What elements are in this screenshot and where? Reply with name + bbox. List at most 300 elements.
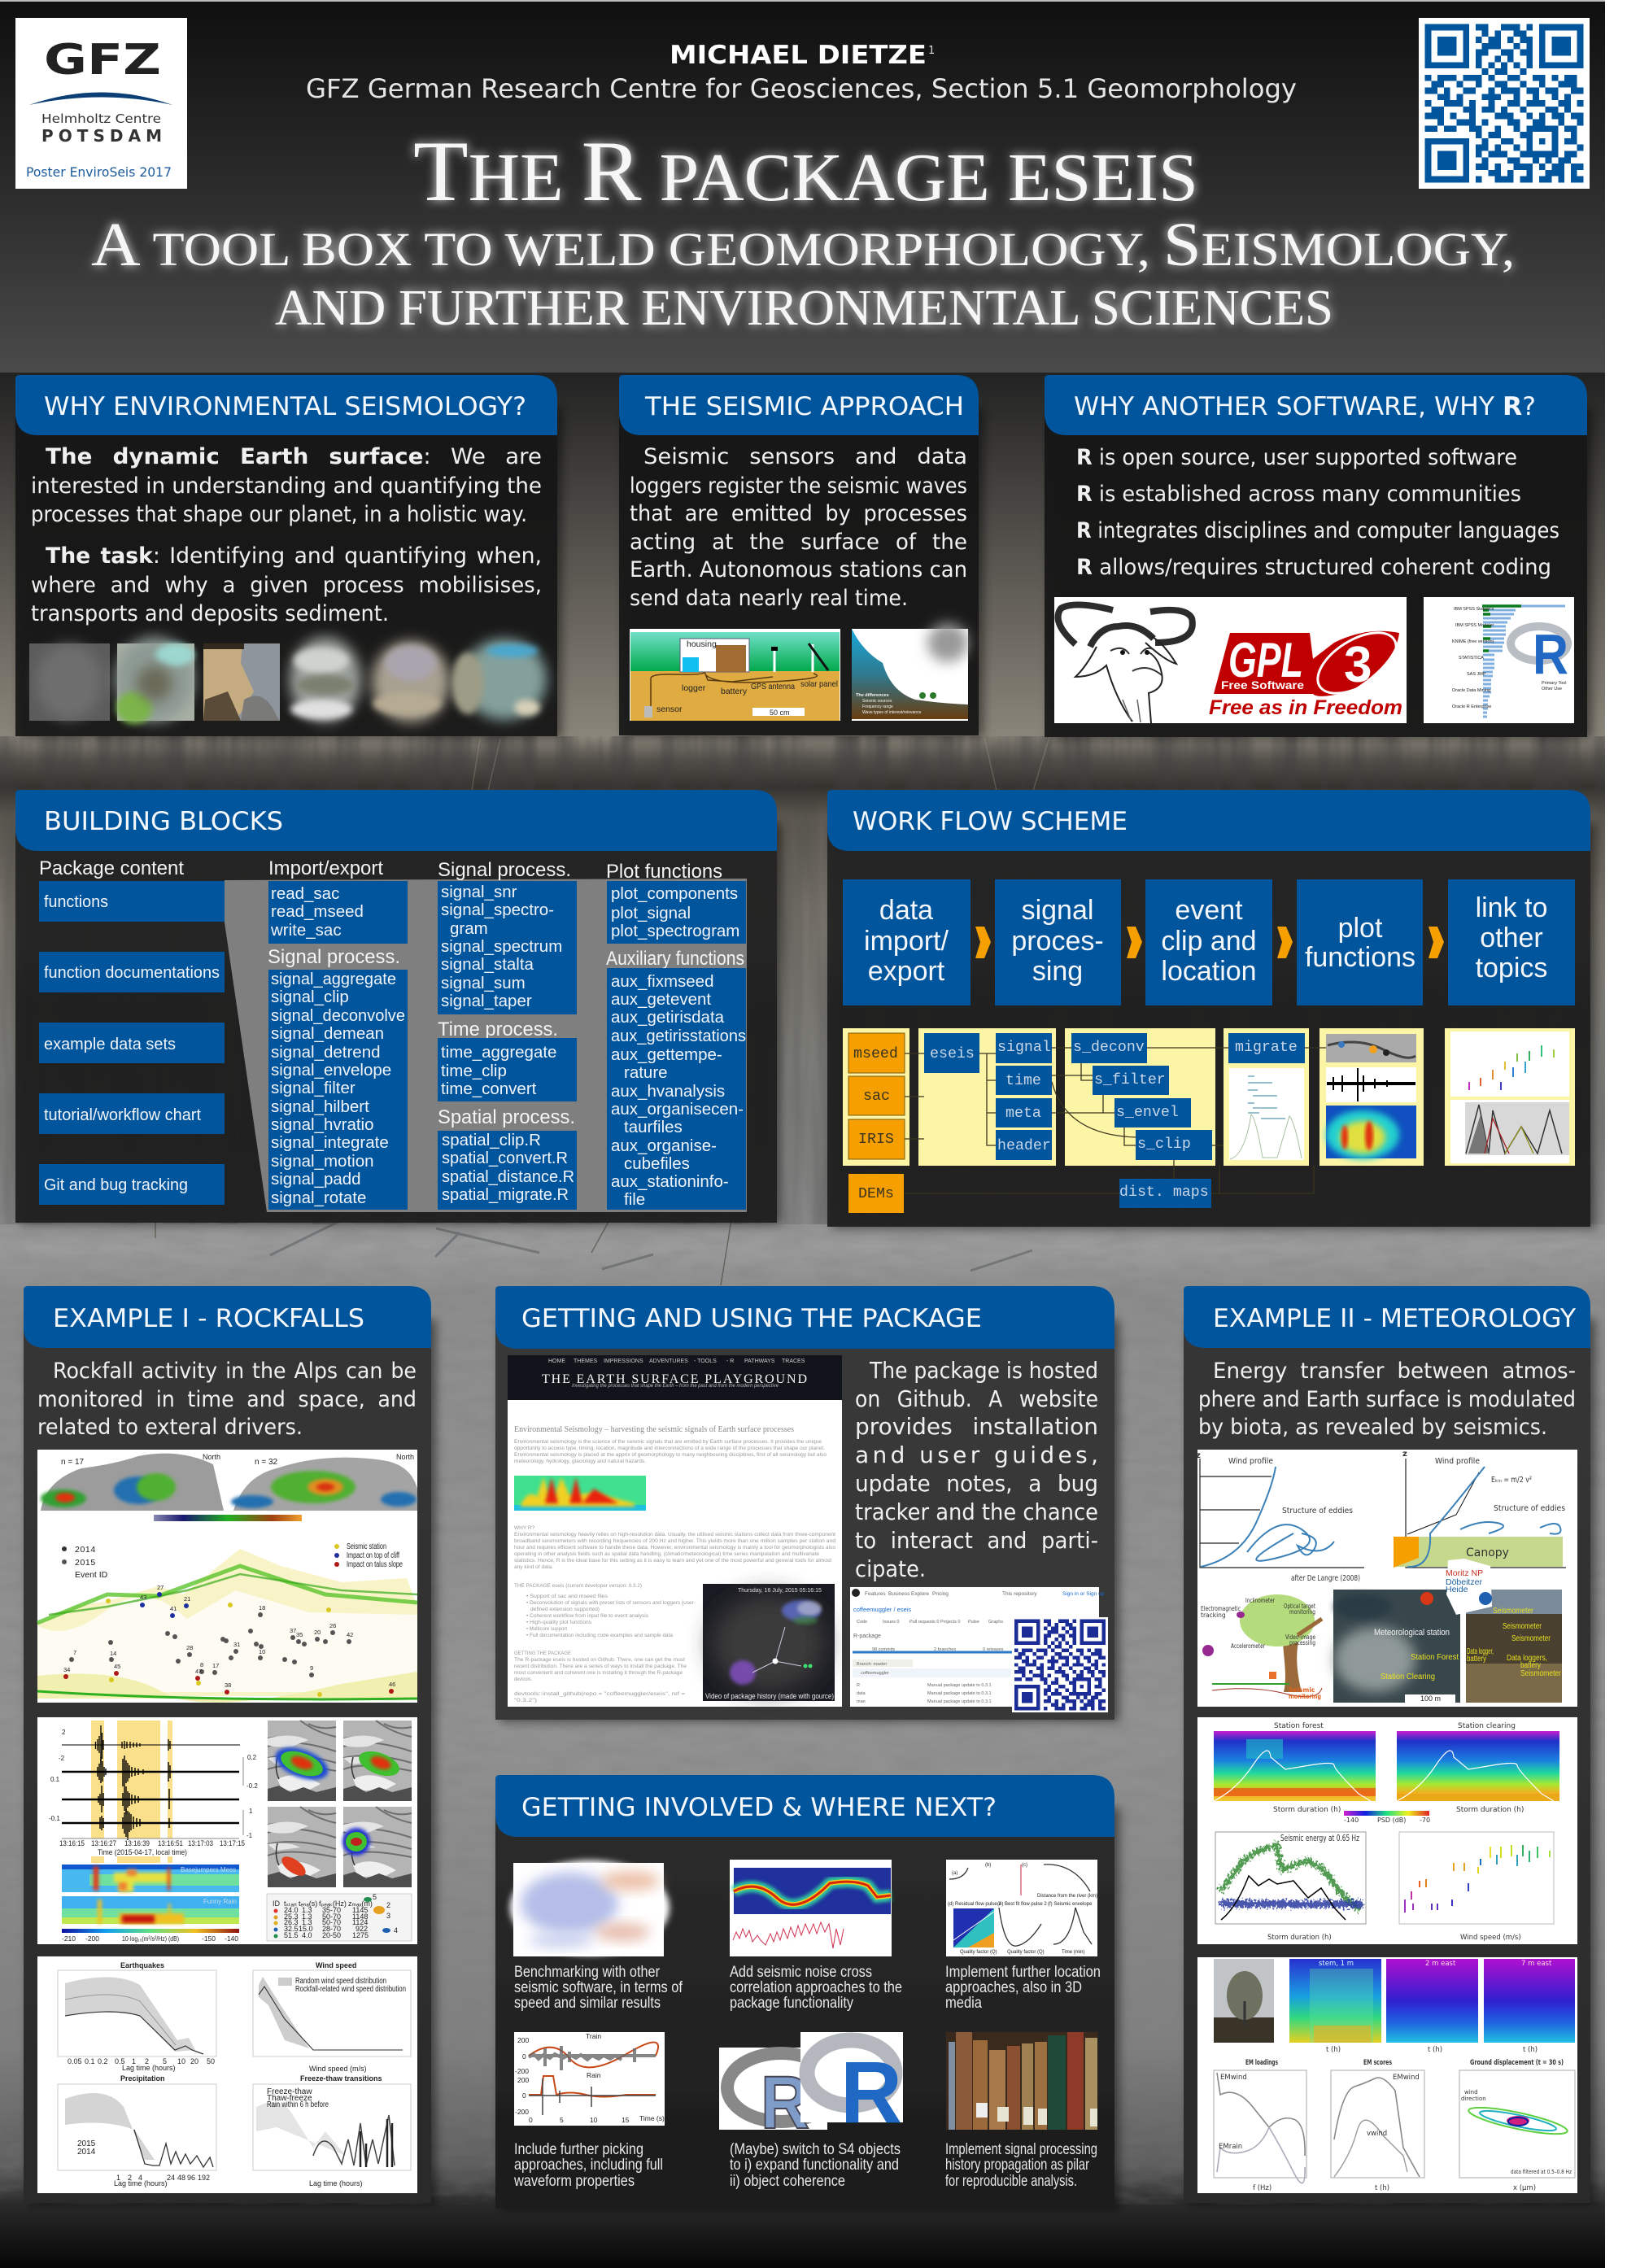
figure: event location map	[37, 1450, 417, 1703]
column: import export and signal: signal_deconvolve	[271, 1006, 405, 1025]
github screenshot: Branch: master	[857, 1662, 887, 1667]
diagram: field station: housing	[687, 639, 717, 649]
figure: seismic waveforms and location: 13:16:51	[158, 1839, 183, 1847]
reasons list: R is open source, user supported software	[1076, 445, 1517, 470]
body text: interested in understanding and quantifying the	[31, 473, 542, 499]
website screenshot: GETTING THE PACKAGE	[514, 1651, 572, 1656]
github screenshot: Projects 0	[940, 1620, 960, 1625]
panel: work flow scheme	[827, 790, 1590, 1227]
figure: seismic waveforms and location: Time (2015-04-17, local time)	[98, 1848, 187, 1856]
panel: building blocks	[15, 790, 777, 1223]
heading: WORK FLOW SCHEME	[853, 807, 1128, 836]
logos: R versions: R	[761, 2061, 809, 2144]
github screenshot: R	[857, 1683, 860, 1688]
QR code for repository	[1012, 1617, 1108, 1712]
caption: history propagation as pilar	[945, 2156, 1089, 2174]
chart: R usage ranking: STATISTICA	[1459, 656, 1484, 661]
heading: GETTING AND USING THE PACKAGE	[521, 1304, 982, 1333]
function labels: s_envel	[1116, 1105, 1179, 1121]
column: import export and signal: signal_detrend	[271, 1043, 381, 1062]
figure: density plots: Wind speed	[316, 1961, 356, 1969]
column: signal time spatial: time_clip	[441, 1062, 507, 1080]
column: plot and auxiliary: taurfiles	[624, 1118, 683, 1136]
package content list: function documentations	[44, 963, 220, 982]
figure: seismic waveforms and location: -210	[62, 1934, 76, 1943]
figure: event location map: 7	[73, 1649, 76, 1656]
thumbnail: migrate output	[1229, 1068, 1304, 1160]
github screenshot: Manual package update to 0.3.1	[927, 1699, 992, 1704]
function labels: dist. maps	[1119, 1184, 1209, 1201]
body text	[31, 444, 542, 626]
figure: tree, spectrograms, end members: t (h)	[1428, 2046, 1442, 2054]
stage boxes: location	[1161, 956, 1257, 987]
website screenshot: • Full documentation including code examples and sample data	[526, 1633, 673, 1638]
caption: media	[945, 1994, 982, 2012]
function boxes	[924, 1033, 1305, 1208]
column: signal time spatial: gram	[450, 919, 488, 938]
figure: wind profiles and site: 100 m	[1420, 1694, 1441, 1703]
image: benchmarking map	[510, 1860, 670, 1956]
figure: spectrograms and seismic energy: -140	[1344, 1817, 1359, 1824]
figure: event location map: 42	[347, 1631, 353, 1638]
website screenshot: defined extension supported)	[530, 1607, 600, 1612]
panel: example II meteorology	[1184, 1286, 1590, 2203]
diagram: field station: sensor	[656, 704, 683, 714]
figure: seismic waveforms and location: 10·log₁₀(m²/s²/Hz) (dB)	[122, 1934, 179, 1943]
website screenshot	[508, 1355, 842, 1707]
figure: seismic waveforms and location: 24.0	[284, 1906, 299, 1914]
stage boxes: import/	[864, 926, 949, 957]
figure: seismic waveforms and location: 13:16:27	[91, 1839, 116, 1847]
image: picking waveforms: -200	[515, 2108, 529, 2116]
figure: seismic waveforms and location: -140	[225, 1934, 238, 1943]
figure: tree, spectrograms, end members: vwind	[1367, 2130, 1387, 2138]
function labels: meta	[1005, 1106, 1041, 1122]
source labels: mseed	[853, 1046, 898, 1062]
figure: density plots: Lag time (hours)	[114, 2179, 168, 2187]
column: signal time spatial: Time process.	[438, 1018, 558, 1040]
heading: WHY ANOTHER SOFTWARE, WHY R?	[1074, 392, 1536, 421]
stage boxes: other	[1480, 922, 1543, 953]
figure: seismic waveforms and location: 28-70	[322, 1925, 341, 1933]
chart: R usage ranking: Other Use	[1542, 687, 1562, 691]
figure: density plots: 2	[128, 2174, 132, 2182]
stage boxes: topics	[1476, 953, 1547, 984]
intro text	[37, 1359, 417, 1440]
diagram: field station: 50 cm	[770, 709, 790, 717]
figure: tree, spectrograms, end members: x (µm)	[1513, 2184, 1536, 2192]
figure: density plots: 192	[198, 2174, 210, 2182]
figure: seismic waveforms and location: tₑₙₐ(s)	[299, 1899, 317, 1908]
figure: density plots: 96	[187, 2174, 195, 2182]
figure: wind profiles and site: tracking	[1201, 1612, 1226, 1619]
function labels: s_deconv	[1073, 1040, 1145, 1056]
image: location approaches: Quality factor (Q)	[1007, 1950, 1045, 1955]
caption: Add seismic noise cross	[730, 1963, 872, 1981]
heading: THE SEISMIC APPROACH	[644, 392, 964, 421]
column: plot and auxiliary: plot_spectrogram	[611, 922, 739, 940]
website screenshot: most convenient and coherent one is installing it through the R-package	[514, 1670, 683, 1676]
diagram: field station: logger	[682, 683, 706, 693]
logo: GFZ Helmholtz Centre Potsdam: Helmholtz Centre	[41, 111, 161, 126]
heading: EXAMPLE I - ROCKFALLS	[53, 1304, 364, 1333]
figure: wind profiles and site: monitoring	[1289, 1693, 1321, 1700]
column: import export and signal	[268, 857, 408, 1210]
image: picking waveforms: Rain	[587, 2071, 601, 2079]
figure: tree, spectrograms, end members: Ground displacement (t = 30 s)	[1470, 2059, 1564, 2067]
image: picking waveforms: Train	[586, 2032, 601, 2040]
QR code top right	[1419, 18, 1590, 189]
column: signal time spatial: spatial_clip.R	[442, 1131, 541, 1149]
figure: density plots: Lag time (hours)	[122, 2064, 176, 2072]
figure: seismic waveforms and location: 32.5	[284, 1925, 299, 1933]
figure: wind profiles and site: battery	[1520, 1661, 1541, 1670]
github screenshot: data	[857, 1691, 866, 1696]
figure: spectrograms and seismic energy: Station forest	[1274, 1722, 1324, 1730]
logos: R versions	[719, 2032, 903, 2144]
column: plot and auxiliary: aux_gettempe-	[611, 1045, 722, 1064]
figure: seismic waveforms and location: 13:17:03	[188, 1839, 213, 1847]
figure: spectrograms and seismic energy: Seismic energy at 0.65 Hz	[1280, 1834, 1359, 1843]
figure: wind profiles and site: Eₖᵢₙ = m/2 v²	[1491, 1476, 1532, 1485]
website screenshot: THEMES	[574, 1359, 597, 1364]
chart: R usage ranking: Primary Tool	[1542, 681, 1566, 686]
figure: seismic waveforms and location: -200	[85, 1934, 99, 1943]
figure: tree, spectrograms, end members: EMrain	[1219, 2143, 1242, 2151]
image: location approaches: (d) Residual flow pulse 2	[948, 1902, 1001, 1907]
figure: spectrograms and seismic energy: Storm duration (h)	[1273, 1806, 1341, 1814]
github screenshot: Pull requests 0	[909, 1620, 939, 1625]
package content list: Package content	[39, 857, 184, 879]
figure: seismic waveforms and location: Basejumpers Mess	[181, 1866, 236, 1873]
figure: tree, spectrograms, end members: EM scores	[1363, 2059, 1392, 2067]
body text: acting at the surface of the	[630, 530, 967, 555]
figure: seismic waveforms and location: ID	[273, 1899, 281, 1908]
figure: wind profiles and site: Seismic	[1289, 1686, 1315, 1694]
github screenshot: man	[857, 1699, 866, 1704]
figure: density plots: 1	[116, 2174, 120, 2182]
figure: seismic waveforms and location: 51.5	[284, 1931, 299, 1939]
function labels: header	[997, 1138, 1051, 1154]
figure: wind profiles and site: z	[1402, 1450, 1407, 1459]
github screenshot: Explore	[911, 1591, 929, 1597]
photo: old books	[946, 2032, 1097, 2130]
column: signal time spatial: spatial_migrate.R	[442, 1185, 569, 1204]
package content list: tutorial/workflow chart	[44, 1106, 201, 1124]
website screenshot: meteorology, hydrology, glaciology and natural hazards.	[514, 1459, 646, 1464]
caption	[730, 2140, 901, 2190]
website screenshot: operating in other analysis fields such as spatial data handling, (climatic/meteorological) time series manipulation and multivariate	[514, 1551, 819, 1557]
logo: GNU GPL3: Free Software	[1221, 678, 1304, 691]
body text: tracker and the chance	[855, 1498, 1098, 1525]
website screenshot: • High-quality plot functions	[526, 1620, 592, 1625]
figure: event location map: 17	[212, 1662, 219, 1669]
column: plot and auxiliary	[606, 861, 746, 1210]
figure: event location map: 10	[259, 1648, 265, 1655]
intro text	[1198, 1359, 1576, 1440]
figure: density plots: Wind speed (m/s)	[309, 2065, 367, 2073]
image: picking waveforms: 15	[622, 2116, 630, 2124]
column: plot and auxiliary: cubefiles	[624, 1154, 690, 1173]
figure: wind profiles and site: Accelerometer	[1231, 1642, 1266, 1650]
diagram: slope with differences: Wave types of interest/relevance	[862, 710, 922, 715]
website screenshot: The R-package eseis is hosted on Github. There, one can get the most	[514, 1657, 685, 1663]
column: plot and auxiliary: rature	[624, 1063, 668, 1082]
caption: speed and similar results	[514, 1994, 661, 2012]
figure: seismic waveforms and location: 1148	[352, 1913, 368, 1921]
figure: event location map: 41	[170, 1605, 177, 1612]
function labels: s_filter	[1094, 1072, 1166, 1088]
body text: Seismic sensors and data	[643, 444, 967, 469]
reasons list: R allows/requires structured coherent coding	[1076, 555, 1551, 580]
column: import export and signal: signal_aggregate	[271, 970, 396, 988]
website screenshot: broadband seismometers with recording frequencies of 200 Hz and higher. This yields more than one million samples per station and	[514, 1538, 835, 1544]
logo: GNU GPL3: Free as in Freedom	[1209, 696, 1402, 719]
image: location approaches: Distance from the river (km)	[1037, 1894, 1097, 1899]
column: import export and signal: signal_demean	[271, 1024, 384, 1043]
column: signal time spatial: signal_spectro-	[441, 901, 554, 919]
logo: GFZ Helmholtz Centre Potsdam: POTSDAM	[41, 126, 162, 146]
figure: seismic waveforms and location: 1.3	[302, 1918, 312, 1926]
reasons list: R integrates disciplines and computer languages	[1076, 518, 1559, 543]
column: plot and auxiliary: file	[624, 1190, 645, 1209]
column: signal time spatial: spatial_convert.R	[442, 1149, 568, 1167]
website screenshot: TRACES	[782, 1359, 805, 1364]
figure: event location map: 27	[157, 1584, 164, 1591]
thumbnail: link charts	[1450, 1032, 1569, 1163]
figure: wind profiles and site: Seismometer	[1493, 1607, 1534, 1616]
figure: seismic waveforms and location: 15.0	[299, 1925, 313, 1933]
image: noise cross correlation	[730, 1860, 892, 1956]
column: plot and auxiliary: aux_getevent	[611, 990, 711, 1009]
image: picking waveforms: 200	[517, 2076, 529, 2084]
diagram: field station	[630, 629, 840, 721]
figure: density plots: Lag time (hours)	[309, 2179, 363, 2187]
column: signal time spatial: signal_spectrum	[441, 937, 562, 956]
source labels	[853, 1046, 898, 1202]
website screenshot: • Coherent workflow from input file to event analysis	[526, 1613, 649, 1619]
figure: event location map: 45	[114, 1663, 120, 1670]
caption: (Maybe) switch to S4 objects	[730, 2140, 901, 2158]
connector lines	[905, 1048, 1326, 1193]
website screenshot: Investigating the processes that shape the Earth – from the past and from the modern perspective	[572, 1383, 779, 1389]
panel: why environmental seismology	[15, 375, 557, 736]
affiliation: GFZ German Research Centre for Geosciences, Section 5.1 Geomorphology	[306, 73, 1297, 104]
source labels: sac	[863, 1088, 890, 1105]
image: location approaches: (a)	[952, 1871, 957, 1876]
column: plot and auxiliary: aux_hvanalysis	[611, 1082, 725, 1101]
intro text: by biota, as revealed by seismics.	[1198, 1415, 1547, 1440]
body text: send data nearly real time.	[630, 586, 908, 611]
website screenshot: • Support of sac and mseed files	[526, 1594, 608, 1599]
website screenshot: THE EARTH SURFACE PLAYGROUND	[542, 1372, 807, 1386]
column: import export and signal: signal_padd	[271, 1170, 361, 1189]
figure: spectrograms and seismic energy: Wind speed (m/s)	[1460, 1934, 1521, 1942]
figure: density plots: 0.05	[68, 2057, 82, 2065]
stage boxes: clip and	[1161, 926, 1257, 957]
caption	[514, 1963, 683, 2012]
column: signal time spatial: Signal process.	[438, 859, 571, 881]
image: picking waveforms: -200	[515, 2067, 529, 2075]
figure: event location map: 14	[110, 1650, 116, 1657]
figure: spectrograms and seismic energy: Storm duration (h)	[1267, 1934, 1332, 1942]
function labels	[930, 1040, 1298, 1201]
github screenshot: coffeemuggler	[861, 1671, 889, 1676]
caption: correlation approaches to the	[730, 1978, 902, 1996]
title: AND FURTHER ENVIRONMENTAL SCIENCES	[275, 281, 1333, 336]
figure: wind profiles and site: after De Langre (2008)	[1291, 1574, 1360, 1583]
figure: event location map: 28	[186, 1644, 193, 1651]
figure: event location map: 26	[329, 1622, 336, 1629]
figure: wind profiles and site: Moritz NP	[1446, 1568, 1483, 1578]
column: import export and signal: signal_hvratio	[271, 1115, 374, 1134]
column: import export and signal: Import/export	[268, 857, 383, 879]
reasons list: R is established across many communities	[1076, 482, 1521, 507]
body text: The package is hosted	[869, 1357, 1098, 1384]
caption: Benchmarking with other	[514, 1963, 660, 1981]
figure: seismic waveforms and location: 5	[373, 1893, 377, 1901]
stage boxes: event	[1175, 895, 1243, 926]
figure: wind profiles and site: Heide	[1446, 1585, 1468, 1594]
website screenshot: Environmental seismology is placed at the apprix of geomorphology to many neighbouring disciplines, first of all seismology but also	[514, 1452, 827, 1458]
function labels: signal	[997, 1040, 1051, 1056]
caption: to i) expand functionality and	[730, 2156, 899, 2174]
panel: example I rockfalls	[24, 1286, 431, 2203]
figure: density plots: Rockfall-related wind speed distribution	[295, 1985, 406, 1994]
stage boxes: export	[868, 956, 945, 987]
body text: to interact and parti-	[855, 1527, 1098, 1554]
figure: wind profiles and site: Optical target	[1284, 1603, 1315, 1610]
figure: wind profiles and site: Wind profile	[1228, 1457, 1273, 1466]
figure: event location map: 37	[290, 1627, 296, 1634]
figure: tree, spectrograms, end members: t (h)	[1326, 2046, 1341, 2054]
figure: wind profiles and site: Döbeitzer	[1446, 1577, 1482, 1587]
inset: package history video: Video of package history (made with gource)	[705, 1692, 834, 1701]
figure: seismic waveforms and location: 0.2	[247, 1754, 257, 1761]
body text: The dynamic Earth surface : We are	[46, 444, 542, 469]
figure: seismic waveforms and location: -150	[202, 1934, 216, 1943]
intro text: related to exteral drivers.	[37, 1415, 303, 1440]
author: MICHAEL DIETZE	[670, 41, 927, 70]
figure: tree, spectrograms, end members: t (h)	[1375, 2184, 1389, 2192]
logo: GNU GPL3	[1054, 597, 1407, 723]
figure: seismic waveforms and location	[37, 1717, 417, 1944]
column: import export and signal: write_sac	[270, 921, 342, 940]
column: plot and auxiliary: aux_fixmseed	[611, 972, 713, 991]
figure: wind profiles and site: Inclinometer	[1245, 1597, 1276, 1604]
figure: density plots: 10	[177, 2057, 185, 2065]
reasons list	[1076, 445, 1559, 580]
stage boxes: sing	[1032, 956, 1083, 987]
figure: wind profiles and site: Structure of eddies	[1282, 1507, 1353, 1516]
figure: event location map: Impact on talus slope	[347, 1560, 403, 1569]
body text: The task: Identifying and quantifying when,	[46, 543, 542, 569]
figure: density plots: Rain within 6 h before	[267, 2100, 329, 2109]
image: location approaches	[946, 1860, 1097, 1956]
image: picking waveforms: 0	[522, 2091, 526, 2100]
chart: R usage ranking: KNIME (free version)	[1452, 639, 1494, 644]
figure: density plots: 48	[177, 2174, 185, 2182]
diagram: field station: GPS antenna	[751, 682, 795, 691]
website screenshot: any kind of data.	[514, 1564, 553, 1570]
github screenshot: R-package	[853, 1633, 881, 1639]
website screenshot: devtools.	[514, 1677, 532, 1682]
image: location approaches: Quality factor (Q)	[960, 1950, 997, 1955]
stage boxes: functions	[1305, 942, 1415, 973]
figure: seismic waveforms and location: tₛₜₐᵣₜ	[284, 1899, 298, 1908]
caption: Implement signal processing	[945, 2140, 1097, 2158]
figure: seismic waveforms and location: 25.3	[284, 1913, 299, 1921]
figure: event location map: 46	[389, 1681, 395, 1688]
image: picking waveforms: 5	[560, 2116, 564, 2124]
figure: wind profiles and site: Seismometer	[1503, 1622, 1542, 1631]
figure: seismic waveforms and location: 4.0	[302, 1931, 312, 1939]
caption: Include further picking	[514, 2140, 643, 2158]
caption: waveform properties	[513, 2172, 635, 2190]
figure: tree, spectrograms, end members: 7 m east	[1521, 1960, 1552, 1968]
figure: wind profiles and site: Seismometer	[1520, 1669, 1562, 1678]
figure: event location map: 2014	[75, 1545, 96, 1555]
panel: the seismic approach	[619, 375, 979, 735]
figure: seismic waveforms and location: Funny Rain	[203, 1898, 237, 1905]
column: signal time spatial: Spatial process.	[438, 1106, 575, 1128]
figure: seismic waveforms and location: -1	[246, 1832, 253, 1839]
website screenshot: THE PACKAGE eseis (current developer version: 0.3.2)	[514, 1583, 642, 1589]
logo: GFZ Helmholtz Centre Potsdam: GFZ	[44, 36, 161, 85]
figure: wind profiles and site: Wind profile	[1435, 1457, 1480, 1466]
inset: package history video: Thursday, 16 July, 2015 05:16:15	[738, 1588, 822, 1594]
figure: wind profiles and site: monitoring	[1289, 1608, 1315, 1616]
figure: event location map: n = 32	[255, 1458, 278, 1467]
column: signal time spatial: signal_taper	[441, 992, 532, 1010]
caption	[730, 1963, 902, 2012]
intro text: phere and Earth surface is modulated	[1198, 1387, 1576, 1412]
figure: tree, spectrograms, end members: EM loadings	[1245, 2059, 1278, 2067]
image: location approaches: Time (min)	[1062, 1950, 1084, 1955]
package content list: functions	[44, 892, 108, 911]
figure: event location map: 2015	[75, 1558, 96, 1568]
website screenshot: statistics. Hence, R is the ideal base for this setting as it is easy to learn and yet one of the most powerful and general tools for almost	[514, 1558, 831, 1564]
figure: wind profiles and site	[1196, 1450, 1577, 1707]
chart: R usage ranking: IBM SPSS Modeler	[1455, 623, 1494, 628]
column: signal time spatial: spatial_distance.R	[442, 1167, 574, 1186]
github screenshot: Issues 0	[883, 1620, 899, 1625]
figure: seismic waveforms and location: -2	[59, 1755, 65, 1762]
caption	[945, 1963, 1101, 2012]
chart: R usage ranking: SAS JMP	[1467, 672, 1486, 677]
github screenshot: Manual package update to 0.3.1	[927, 1691, 992, 1696]
caption: package functionality	[730, 1994, 853, 2012]
figure: event location map: 18	[259, 1604, 265, 1612]
figure: wind profiles and site: Meteorological station	[1374, 1628, 1450, 1638]
figure: density plots: 2014	[77, 2148, 96, 2157]
column: plot and auxiliary: plot_components	[611, 884, 738, 903]
figure: seismic waveforms and location: -0.2	[246, 1782, 258, 1790]
column: import export and signal: read_mseed	[271, 902, 364, 921]
github screenshot: Business	[888, 1591, 910, 1597]
function labels: eseis	[930, 1046, 975, 1062]
image: location approaches: (e) Best fit flow pulse 2	[997, 1902, 1047, 1907]
diagram: slope with differences	[852, 623, 968, 721]
body text: cipate.	[855, 1555, 926, 1582]
heading: GETTING INVOLVED & WHERE NEXT?	[521, 1793, 997, 1822]
figure: density plots: 0.5	[115, 2057, 125, 2065]
figure: event location map: 21	[184, 1595, 190, 1603]
column: import export and signal: signal_hilbert	[271, 1097, 369, 1116]
figure: spectrograms and seismic energy	[1197, 1717, 1577, 1944]
body text: transports and deposits sediment.	[31, 601, 389, 626]
figure: density plots: 0.1	[85, 2057, 95, 2065]
